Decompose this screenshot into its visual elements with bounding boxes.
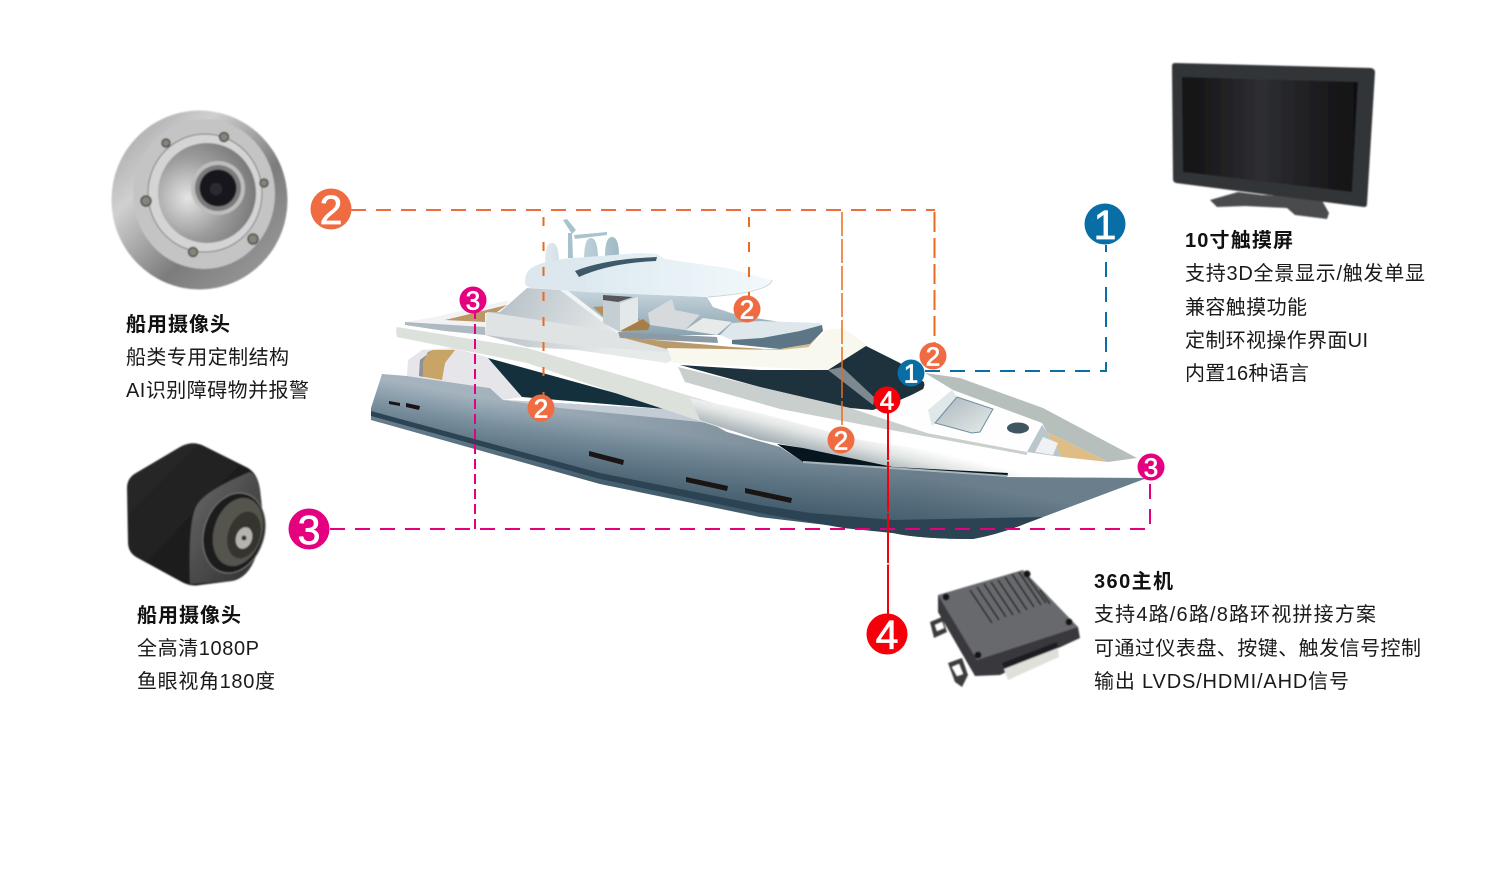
marker: 3 aft deck xyxy=(460,286,486,316)
text: marine camera 1: AI识别障碍物并报警 xyxy=(126,379,309,402)
superstructure wedge xyxy=(485,288,700,363)
stern cabin and window xyxy=(407,348,677,410)
hardtop roof xyxy=(525,253,772,297)
icon: 10 inch touch monitor xyxy=(1172,63,1375,219)
marker: 2 windscreen xyxy=(920,342,946,372)
marker: 2 cockpit xyxy=(734,294,760,324)
text: marine camera 2: 全高清1080P xyxy=(137,637,259,660)
marker: 4 red large: 4 xyxy=(876,612,898,658)
text: marine camera 1: 船类专用定制结构 xyxy=(126,346,289,369)
cockpit seats xyxy=(603,295,780,350)
marker: 2 stern window xyxy=(528,394,554,424)
marker: 4 red large xyxy=(866,612,908,658)
illustration: yacht xyxy=(371,219,1147,539)
text: touch monitor specs: 兼容触摸功能 xyxy=(1185,296,1307,319)
icon: round metal marine camera xyxy=(112,110,288,290)
marker: 4 windscreen: 4 xyxy=(880,386,894,416)
text: marine camera 2: 船用摄像头 xyxy=(137,604,241,627)
marker: 2 windscreen: 2 xyxy=(926,342,940,372)
main rail stripe xyxy=(396,327,1137,477)
marker: 1 blue large: 1 xyxy=(1094,202,1116,248)
marker: 1 windscreen xyxy=(898,358,924,388)
marker: 3 magenta large: 3 xyxy=(298,507,320,553)
windscreen xyxy=(678,346,1027,455)
marker: 3 bow: 3 xyxy=(1144,452,1158,482)
text: touch monitor specs: 支持3D全景显示/触发单显 xyxy=(1185,262,1425,285)
connector line: red xyxy=(887,410,889,625)
marker: 3 bow xyxy=(1138,452,1164,482)
connector lines: orange xyxy=(351,210,935,428)
text: marine camera 1 xyxy=(126,313,309,402)
text: touch monitor specs: 定制环视操作界面UI xyxy=(1185,329,1368,352)
cabin behind cockpit xyxy=(560,290,780,335)
cream front cabin xyxy=(667,328,867,370)
marker: 4 windscreen xyxy=(874,386,900,416)
text: touch monitor specs: 内置16种语言 xyxy=(1185,362,1309,385)
marker: 2 orange large xyxy=(310,187,352,233)
text: 360 host specs: 支持4路/6路/8路环视拼接方案 xyxy=(1094,603,1376,626)
text: marine camera 1: 船用摄像头 xyxy=(126,313,230,336)
marker: 3 magenta large xyxy=(288,507,330,553)
bridge console xyxy=(720,321,823,352)
foredeck xyxy=(900,373,1137,462)
marker: 2 orange large: 2 xyxy=(320,187,342,233)
text: marine camera 2: 鱼眼视角180度 xyxy=(137,670,275,693)
marker: 2 cockpit: 2 xyxy=(740,294,754,324)
text: 360 host specs: 可通过仪表盘、按键、触发信号控制 xyxy=(1094,637,1421,660)
icon: square black fisheye camera xyxy=(127,443,275,586)
text: 360 host specs xyxy=(1094,570,1421,693)
text: touch monitor specs: 10寸触摸屏 xyxy=(1185,229,1293,252)
yacht hull xyxy=(371,374,1147,539)
marker: 2 side window xyxy=(828,426,854,456)
text: touch monitor specs xyxy=(1185,229,1425,385)
aft deck xyxy=(405,300,510,335)
text: 360 host specs: 输出 LVDS/HDMI/AHD信号 xyxy=(1094,670,1349,693)
connector lines: magenta xyxy=(330,313,1150,529)
marker: 2 side window: 2 xyxy=(834,426,848,456)
text: 360 host specs: 360主机 xyxy=(1094,570,1173,593)
radar arch and domes xyxy=(545,219,619,263)
marker: 2 stern window: 2 xyxy=(534,394,548,424)
marker: 3 aft deck: 3 xyxy=(466,286,480,316)
marker: 1 windscreen: 1 xyxy=(904,358,918,388)
text: marine camera 2 xyxy=(137,604,275,693)
connector line: blue xyxy=(925,245,1106,371)
marker: 1 blue large xyxy=(1084,202,1126,248)
icon: 360 host unit xyxy=(930,570,1080,687)
